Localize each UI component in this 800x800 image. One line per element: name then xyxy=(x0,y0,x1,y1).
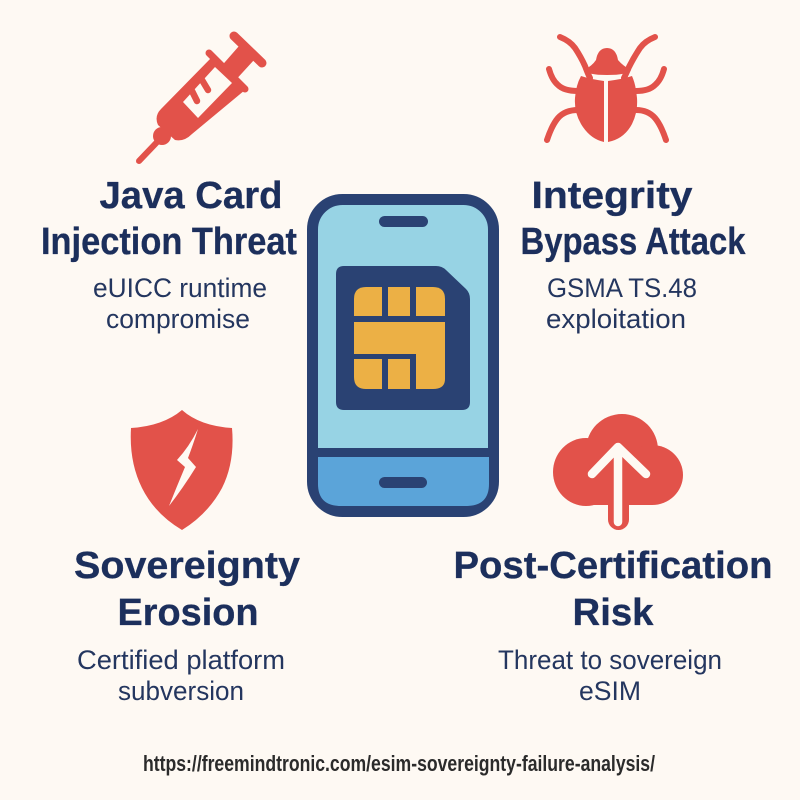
home button xyxy=(379,477,427,488)
icon: syringe xyxy=(139,36,262,161)
phone body xyxy=(312,200,494,512)
block: Integrity Bypass Attack: exploitation xyxy=(546,304,686,334)
phone lower panel xyxy=(318,457,489,506)
phone with SIM card xyxy=(312,200,494,512)
block: Post-Certification Risk: Risk xyxy=(572,592,654,634)
block: Java Card Injection Threat: Injection Threat xyxy=(41,221,297,263)
description: GSMA TS.48 xyxy=(547,273,697,303)
SIM chip xyxy=(354,287,445,389)
heading: Integrity xyxy=(532,175,692,217)
SIM card xyxy=(336,266,470,410)
block: Sovereignty Erosion: subversion xyxy=(118,676,244,706)
block: Sovereignty Erosion: Erosion xyxy=(118,592,258,634)
block: Sovereignty Erosion xyxy=(74,545,300,706)
block: Post-Certification Risk xyxy=(454,545,772,706)
icon: shield with lightning bolt xyxy=(131,410,233,530)
block: Integrity Bypass Attack xyxy=(520,175,746,334)
block: Integrity Bypass Attack: Bypass Attack xyxy=(520,221,746,263)
block: Java Card Injection Threat xyxy=(41,175,297,334)
icon: cloud with upload arrow xyxy=(553,414,683,530)
block: Java Card Injection Threat: compromise xyxy=(106,304,250,334)
heading: Sovereignty xyxy=(74,545,300,587)
description: Threat to sovereign xyxy=(498,645,722,675)
heading: Post-Certification xyxy=(454,545,772,587)
description: eUICC runtime xyxy=(93,273,267,303)
source URL: https://freemindtronic.com/esim-sovereignty-failure-analysis/ xyxy=(143,751,655,776)
description: Certified platform xyxy=(77,645,285,675)
speaker xyxy=(379,216,428,227)
icon: bug xyxy=(547,37,666,142)
heading: Java Card xyxy=(100,175,282,217)
block: Post-Certification Risk: eSIM xyxy=(579,676,641,706)
